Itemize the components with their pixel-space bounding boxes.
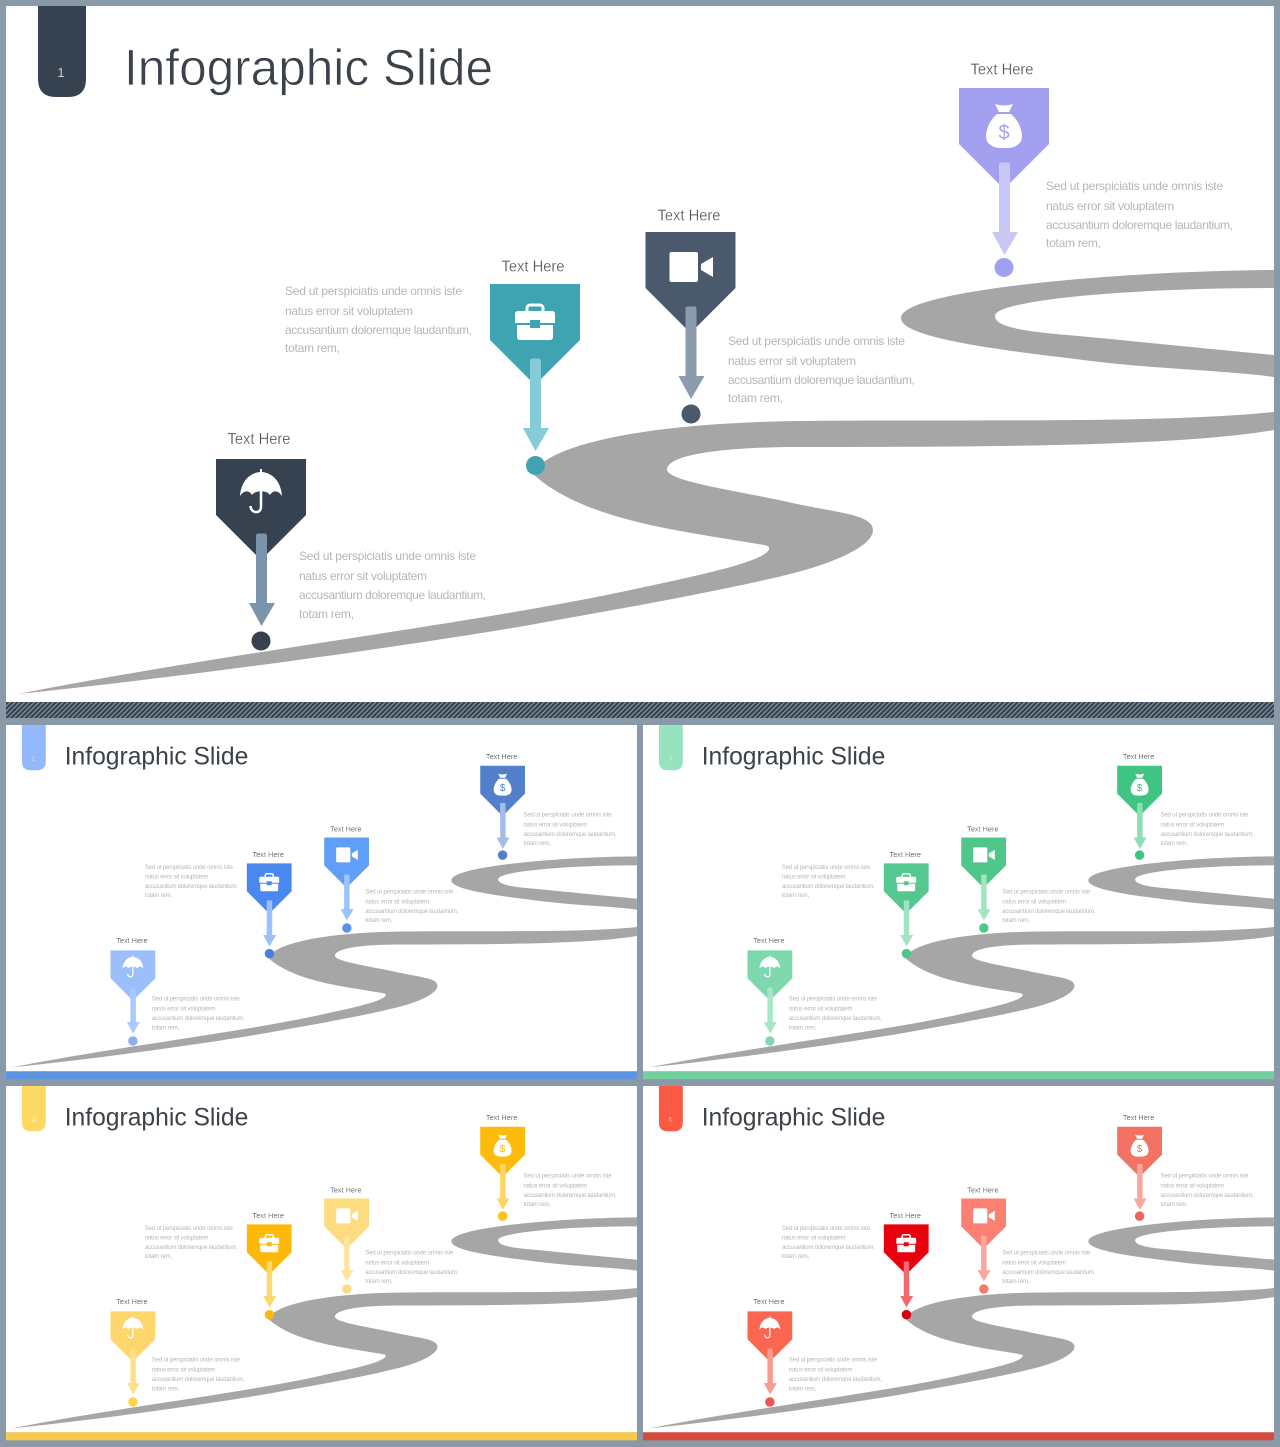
page tab 4 bbox=[22, 1086, 46, 1131]
title: Infographic Slide bbox=[124, 39, 493, 96]
milestone 1 text: Sed ut perspiciatis unde omnis iste bbox=[152, 1358, 241, 1364]
milestone 3 text: natus error sit voluptatem bbox=[728, 354, 856, 368]
milestone 2 text: accusantium doloremque laudantium, bbox=[782, 884, 875, 890]
page tab 1 bbox=[38, 6, 86, 97]
milestone 3 text bbox=[1002, 890, 1096, 924]
milestone 2 text: totam rem, bbox=[782, 1254, 810, 1260]
milestone 3 text: accusantium doloremque laudantium, bbox=[365, 909, 459, 915]
milestone 4: money bag: Text Here bbox=[1123, 1113, 1154, 1122]
milestone 3: video bbox=[961, 1186, 1006, 1294]
milestone 1 text: accusantium doloremque laudantium, bbox=[789, 1016, 882, 1022]
milestone 2 text: natus error sit voluptatem bbox=[782, 875, 846, 881]
milestone 3: video bbox=[961, 825, 1006, 933]
milestone 2: briefcase: Text Here bbox=[890, 850, 921, 859]
milestone 1: umbrella: Text Here bbox=[116, 936, 148, 945]
milestone 3 text: accusantium doloremque laudantium, bbox=[728, 373, 915, 387]
milestone 3 text: natus error sit voluptatem bbox=[1002, 1261, 1066, 1267]
milestone 1 text: accusantium doloremque laudantium, bbox=[152, 1016, 245, 1022]
milestone 3 text: accusantium doloremque laudantium, bbox=[1002, 1270, 1096, 1276]
milestone 4: money bag: Text Here bbox=[970, 62, 1034, 78]
milestone 1 text: totam rem, bbox=[789, 1387, 816, 1393]
milestone 2 text: accusantium doloremque laudantium, bbox=[145, 1245, 238, 1251]
milestone 3: video: Text Here bbox=[658, 208, 720, 224]
milestone 4 text: accusantium doloremque laudantium, bbox=[1161, 1193, 1254, 1199]
milestone 4 text: Sed ut perspiciatis unde omnis iste bbox=[524, 813, 612, 819]
milestone 4: money bag bbox=[1117, 1113, 1162, 1221]
milestone 2: briefcase bbox=[490, 258, 580, 475]
winding road bbox=[18, 270, 1274, 694]
milestone 1 text: accusantium doloremque laudantium, bbox=[299, 588, 486, 602]
milestone 3: video: Text Here bbox=[967, 1186, 999, 1195]
milestone 2: briefcase bbox=[247, 850, 292, 958]
milestone 4 text bbox=[1161, 813, 1254, 847]
winding road bbox=[649, 856, 1274, 1067]
milestone 2 text: natus error sit voluptatem bbox=[782, 1236, 846, 1242]
winding road bbox=[649, 1217, 1274, 1428]
milestone 4: money bag: $ bbox=[1137, 1144, 1143, 1155]
milestone 2: briefcase: Text Here bbox=[253, 850, 284, 859]
milestone 3 text: totam rem, bbox=[365, 1279, 393, 1285]
panel: yellow slide 4 bbox=[6, 1086, 637, 1440]
milestone 3 text: accusantium doloremque laudantium, bbox=[1002, 909, 1096, 915]
milestone 4 text: natus error sit voluptatem bbox=[524, 1184, 587, 1190]
milestone 2 text: Sed ut perspiciatis unde omnis iste bbox=[285, 284, 462, 298]
milestone 4 text: Sed ut perspiciatis unde omnis iste bbox=[524, 1174, 612, 1180]
milestone 2 text bbox=[782, 865, 875, 899]
milestone 1 text: natus error sit voluptatem bbox=[789, 1368, 853, 1374]
milestone 4: money bag: $ bbox=[1137, 783, 1143, 794]
bottom colour bar bbox=[643, 1432, 1274, 1440]
milestone 2 text bbox=[145, 865, 238, 899]
milestone 1 text bbox=[152, 997, 245, 1032]
milestone 1 text: Sed ut perspiciatis unde omnis iste bbox=[789, 1358, 878, 1364]
milestone 3: video bbox=[646, 208, 736, 424]
milestone 4: money bag bbox=[959, 62, 1049, 277]
milestone 1 text: natus error sit voluptatem bbox=[789, 1007, 853, 1013]
milestone 1: umbrella: Text Here bbox=[228, 431, 290, 448]
title: Infographic Slide bbox=[702, 742, 885, 770]
milestone 1: umbrella bbox=[110, 936, 155, 1046]
milestone 4 text: accusantium doloremque laudantium, bbox=[1161, 832, 1254, 838]
milestone 2 text: accusantium doloremque laudantium, bbox=[285, 323, 472, 337]
milestone 2 text bbox=[285, 284, 472, 355]
milestone 3: video: Text Here bbox=[330, 1186, 362, 1195]
milestone 4 text: natus error sit voluptatem bbox=[1046, 199, 1174, 213]
milestone 3 text: totam rem, bbox=[728, 391, 783, 405]
milestone 4 text: Sed ut perspiciatis unde omnis iste bbox=[1046, 179, 1223, 193]
milestone 4 text: totam rem, bbox=[1161, 841, 1188, 847]
milestone 3 text: accusantium doloremque laudantium, bbox=[365, 1270, 459, 1276]
panel: green slide 3 bbox=[643, 725, 1274, 1079]
milestone 1: umbrella bbox=[110, 1297, 155, 1407]
page tab 5 bbox=[659, 1086, 683, 1131]
page tab 1: 1 bbox=[57, 65, 65, 80]
title: Infographic Slide bbox=[65, 742, 248, 770]
milestone 4 text: natus error sit voluptatem bbox=[524, 823, 587, 829]
page tab 5: 5 bbox=[669, 1116, 673, 1123]
milestone 1 text: natus error sit voluptatem bbox=[152, 1368, 216, 1374]
milestone 3: video: Text Here bbox=[330, 825, 362, 834]
milestone 3 text: totam rem, bbox=[1002, 918, 1030, 924]
milestone 2 text: Sed ut perspiciatis unde omnis iste bbox=[782, 865, 871, 871]
milestone 3 text: natus error sit voluptatem bbox=[1002, 900, 1066, 906]
milestone 2 text: accusantium doloremque laudantium, bbox=[145, 884, 238, 890]
milestone 1: umbrella bbox=[747, 1297, 792, 1407]
milestone 2 text: Sed ut perspiciatis unde omnis iste bbox=[145, 865, 234, 871]
milestone 4 text: accusantium doloremque laudantium, bbox=[1046, 218, 1233, 232]
milestone 4: money bag bbox=[480, 752, 525, 860]
milestone 2 text: totam rem, bbox=[285, 341, 340, 355]
milestone 2 text bbox=[782, 1226, 875, 1260]
milestone 1: umbrella bbox=[747, 936, 792, 1046]
panel: red slide 5 bbox=[643, 1086, 1274, 1440]
milestone 3 text: Sed ut perspiciatis unde omnis iste bbox=[365, 1251, 454, 1257]
milestone 1 text: totam rem, bbox=[789, 1026, 816, 1032]
milestone 3 text: Sed ut perspiciatis unde omnis iste bbox=[728, 334, 905, 348]
milestone 2 text: natus error sit voluptatem bbox=[145, 1236, 209, 1242]
milestone 3: video: Text Here bbox=[967, 825, 999, 834]
milestone 4 text bbox=[524, 813, 617, 847]
milestone 3 text: Sed ut perspiciatis unde omnis iste bbox=[365, 890, 454, 896]
milestone 4: money bag: $ bbox=[500, 1144, 506, 1155]
milestone 2 text: totam rem, bbox=[145, 1254, 173, 1260]
milestone 1 text: totam rem, bbox=[299, 607, 354, 621]
milestone 2: briefcase bbox=[247, 1211, 292, 1319]
milestone 4: money bag bbox=[1117, 752, 1162, 860]
milestone 4 text: totam rem, bbox=[524, 1202, 551, 1208]
milestone 1 text: totam rem, bbox=[152, 1387, 179, 1393]
milestone 1 text: Sed ut perspiciatis unde omnis iste bbox=[299, 549, 476, 563]
milestone 1: umbrella: Text Here bbox=[116, 1297, 148, 1306]
milestone 2: briefcase bbox=[884, 1211, 929, 1319]
milestone 1 text bbox=[299, 549, 486, 621]
milestone 3 text: Sed ut perspiciatis unde omnis iste bbox=[1002, 1251, 1091, 1257]
page tab 3: 3 bbox=[669, 755, 673, 762]
bottom colour bar bbox=[643, 1071, 1274, 1079]
page tab 2 bbox=[22, 725, 46, 770]
milestone 2: briefcase bbox=[884, 850, 929, 958]
milestone 3 text: natus error sit voluptatem bbox=[365, 900, 429, 906]
milestone 4 text: totam rem, bbox=[524, 841, 551, 847]
milestone 3 text: Sed ut perspiciatis unde omnis iste bbox=[1002, 890, 1091, 896]
milestone 4 text: Sed ut perspiciatis unde omnis iste bbox=[1161, 813, 1249, 819]
bottom colour bar bbox=[6, 1071, 637, 1079]
panel: blue slide 2 bbox=[6, 725, 637, 1079]
milestone 2: briefcase: Text Here bbox=[502, 258, 564, 276]
milestone 4 text: accusantium doloremque laudantium, bbox=[524, 832, 617, 838]
milestone 3 text bbox=[365, 1251, 459, 1285]
winding road bbox=[12, 856, 637, 1067]
title: Infographic Slide bbox=[65, 1103, 248, 1131]
milestone 1 text bbox=[152, 1358, 245, 1393]
milestone 3 text: totam rem, bbox=[365, 918, 393, 924]
milestone 4 text bbox=[1161, 1174, 1254, 1208]
milestone 1: umbrella: Text Here bbox=[753, 1297, 785, 1306]
milestone 1 text: natus error sit voluptatem bbox=[299, 569, 427, 583]
milestone 4: money bag: $ bbox=[998, 122, 1010, 144]
milestone 4 text: totam rem, bbox=[1161, 1202, 1188, 1208]
milestone 4 text: Sed ut perspiciatis unde omnis iste bbox=[1161, 1174, 1249, 1180]
milestone 1: umbrella bbox=[216, 431, 306, 650]
milestone 4: money bag: $ bbox=[500, 783, 506, 794]
milestone 3: video bbox=[324, 825, 369, 933]
milestone 1 text: accusantium doloremque laudantium, bbox=[789, 1377, 882, 1383]
milestone 1 text: natus error sit voluptatem bbox=[152, 1007, 216, 1013]
milestone 2 text: totam rem, bbox=[145, 893, 173, 899]
milestone 2 text bbox=[145, 1226, 238, 1260]
milestone 4 text: natus error sit voluptatem bbox=[1161, 823, 1224, 829]
milestone 1 text bbox=[789, 997, 882, 1032]
milestone 3 text bbox=[365, 890, 459, 924]
panel: main slide 1 bbox=[6, 6, 1274, 718]
winding road bbox=[12, 1217, 637, 1428]
milestone 3 text: totam rem, bbox=[1002, 1279, 1030, 1285]
milestone 2 text: totam rem, bbox=[782, 893, 810, 899]
hatched divider band bbox=[6, 702, 1274, 718]
milestone 3 text bbox=[1002, 1251, 1096, 1285]
page tab 4: 4 bbox=[32, 1116, 36, 1123]
milestone 1 text bbox=[789, 1358, 882, 1393]
milestone 2: briefcase: Text Here bbox=[253, 1211, 284, 1220]
milestone 2 text: accusantium doloremque laudantium, bbox=[782, 1245, 875, 1251]
milestone 3: video bbox=[324, 1186, 369, 1294]
milestone 1 text: totam rem, bbox=[152, 1026, 179, 1032]
milestone 2 text: Sed ut perspiciatis unde omnis iste bbox=[782, 1226, 871, 1232]
milestone 4: money bag: Text Here bbox=[486, 752, 517, 761]
milestone 4: money bag: Text Here bbox=[486, 1113, 517, 1122]
milestone 1 text: Sed ut perspiciatis unde omnis iste bbox=[789, 997, 878, 1003]
milestone 1 text: Sed ut perspiciatis unde omnis iste bbox=[152, 997, 241, 1003]
milestone 1: umbrella: Text Here bbox=[753, 936, 785, 945]
page tab 2: 2 bbox=[32, 755, 36, 762]
page tab 3 bbox=[659, 725, 683, 770]
milestone 4 text: natus error sit voluptatem bbox=[1161, 1184, 1224, 1190]
milestone 4 text: totam rem, bbox=[1046, 236, 1101, 250]
milestone 4 text bbox=[524, 1174, 617, 1208]
milestone 4 text: accusantium doloremque laudantium, bbox=[524, 1193, 617, 1199]
milestone 3 text: natus error sit voluptatem bbox=[365, 1261, 429, 1267]
milestone 4: money bag bbox=[480, 1113, 525, 1221]
milestone 2 text: natus error sit voluptatem bbox=[285, 304, 413, 318]
bottom colour bar bbox=[6, 1432, 637, 1440]
milestone 3 text bbox=[728, 334, 915, 405]
milestone 2 text: Sed ut perspiciatis unde omnis iste bbox=[145, 1226, 234, 1232]
milestone 2 text: natus error sit voluptatem bbox=[145, 875, 209, 881]
milestone 2: briefcase: Text Here bbox=[890, 1211, 921, 1220]
title: Infographic Slide bbox=[702, 1103, 885, 1131]
milestone 4: money bag: Text Here bbox=[1123, 752, 1154, 761]
milestone 4 text bbox=[1046, 179, 1233, 250]
milestone 1 text: accusantium doloremque laudantium, bbox=[152, 1377, 245, 1383]
